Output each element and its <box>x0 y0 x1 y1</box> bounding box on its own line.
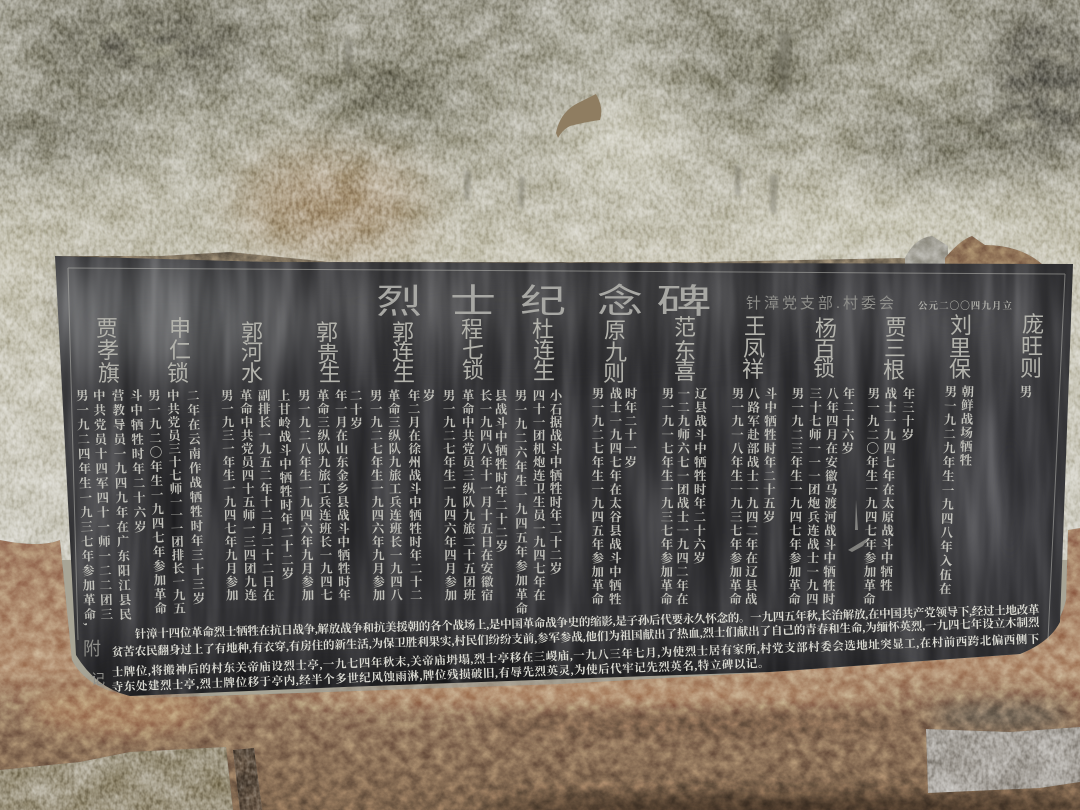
vertical biography columns: 革命中共党员三纵队九旅二十五团班 <box>459 388 476 602</box>
names of the fourteen martyrs: 东 <box>674 339 696 364</box>
names of the fourteen martyrs: 连 <box>392 340 414 365</box>
vertical biography columns: 长一九四八年十一月十五日在安徽宿 <box>478 388 494 602</box>
names of the fourteen martyrs: 孝 <box>97 338 119 363</box>
vertical biography columns: 男一九二八年生一九四六年九月参加 <box>296 389 314 602</box>
vertical biography columns: 营教导员一九四九年在广东阳江县民 <box>109 388 132 623</box>
bottom inscription paragraph: 寺东处建烈士亭,烈士牌位移于亭内,经半个多世纪风蚀雨淋,牌位残损破旧,有辱先烈英灵,为使后代牢记先烈英名,特立碑以记。 <box>112 656 770 694</box>
vertical biography columns: 岁 <box>421 388 435 402</box>
vertical biography columns <box>74 384 1032 628</box>
names of the fourteen martyrs: 保 <box>949 357 971 382</box>
date line: 公元二〇〇四九月立 <box>918 300 1012 312</box>
names of the fourteen martyrs: 仁 <box>169 338 191 363</box>
names of the fourteen martyrs: 九 <box>605 340 627 365</box>
vertical biography columns: 男一九二〇年生一九四七年参加革命 <box>146 389 167 616</box>
names of the fourteen martyrs: 程 <box>461 317 483 342</box>
vertical biography columns: 二年在云南作战牺牲时年三十三岁 <box>185 389 205 607</box>
vertical biography columns: 辽县战斗中牺牲时年二十六岁 <box>691 387 707 565</box>
names of the fourteen martyrs: 申 <box>169 316 191 341</box>
stone block bottom left <box>0 747 262 810</box>
slab engraved border lines <box>68 268 1065 640</box>
vertical biography columns: 年一月在山东金乡县战斗中牺牲时年 <box>333 388 351 602</box>
names of the fourteen martyrs: 生 <box>533 359 555 384</box>
names of the fourteen martyrs: 凤 <box>743 336 765 361</box>
vertical biography columns: 男一九二四年生一九三七年参加革命, <box>74 389 97 628</box>
left side label: 附记: 记 <box>91 671 105 687</box>
vertical biography columns: 三十七师一一一团炮兵连战士一九四 <box>804 387 823 606</box>
vertical biography columns: 上甘岭战斗中牺牲时年二十二岁 <box>276 388 294 581</box>
vertical biography columns: 男一九二七年生一九四六年四月参加 <box>441 389 457 602</box>
names of the fourteen martyrs: 贾 <box>885 315 907 340</box>
vertical biography columns: 革命中共党员四十五师一三四团九连 <box>237 388 257 602</box>
stone block bottom right <box>926 727 1080 793</box>
names of the fourteen martyrs: 喜 <box>674 359 696 384</box>
names of the fourteen martyrs: 锁 <box>462 358 484 383</box>
vertical biography columns: 男一九二七年生一九四六年九月参加 <box>368 389 385 602</box>
bottom inscription paragraph: 士牌位,将搬神后的村东关帝庙设烈士亭,一九七四年秋末,关帝庙坍塌,烈士亭移在三嵕庙,一九八三年七月,为使烈士居有家所,村党支部村委会选地址突显工,在村前西跨北偏西侧下 <box>112 632 1040 679</box>
names of the fourteen martyrs: 原 <box>604 318 626 343</box>
vertical biography columns: 战士一九四七年在太谷县战斗中牺牲 <box>607 386 622 606</box>
names of the fourteen martyrs: 郭 <box>241 320 263 345</box>
names of the fourteen martyrs: 则 <box>1020 356 1042 381</box>
panel: dark stone memorial slab <box>10 250 1080 714</box>
vertical biography columns: 男一九二六年生一九四五年参加革命 <box>513 389 528 616</box>
vertical biography columns: 斗中牺牲时年二十六岁 <box>128 388 147 535</box>
ground: soil in front of the wall <box>0 528 1080 810</box>
vertical biography columns: 男一九三一年生一九四七年九月参加 <box>219 389 239 602</box>
vertical biography columns: 革命三纵队九旅工兵连班长一九四七 <box>315 388 333 602</box>
names of the fourteen martyrs: 百 <box>814 337 836 362</box>
names of the fourteen martyrs: 杜 <box>532 317 554 342</box>
wall damage: exposed patch <box>556 94 601 138</box>
title: 烈士纪念碑: 碑 <box>656 282 712 320</box>
vertical biography columns: 二十岁 <box>348 389 363 431</box>
vertical biography columns: 男一九二〇年生一九四七年参加革命 <box>861 387 880 606</box>
names of the fourteen martyrs: 杨 <box>815 316 837 341</box>
left side label: 附记: 附 <box>83 639 101 659</box>
title: 烈士纪念碑: 纪 <box>520 282 566 321</box>
vertical biography columns: 县战斗中牺牲时年二十二岁 <box>493 388 508 553</box>
names of the fourteen martyrs: 根 <box>883 358 905 383</box>
names of the fourteen martyrs: 郭 <box>392 320 414 345</box>
vertical biography columns: 八年四月在安徽马渡河战斗中牺牲时 <box>821 387 839 606</box>
names of the fourteen martyrs: 刘 <box>950 313 972 338</box>
vertical biography columns: 男一九二九年生一九四八年入伍在 <box>937 385 957 597</box>
vertical biography columns: 年三十岁 <box>900 386 915 442</box>
vertical biography columns: 男 <box>1018 385 1032 398</box>
vertical biography columns: 八路军赴部战士一九四二年在辽县战 <box>743 387 760 606</box>
names of the fourteen martyrs: 七 <box>462 338 484 363</box>
names of the fourteen martyrs: 生 <box>393 361 415 386</box>
vertical biography columns: 年二月在徐州战斗中牺牲时年二十二 <box>406 388 423 602</box>
left side label: 附记 <box>83 639 105 687</box>
vertical biography columns: 小石据战斗中牺牲时年二十二岁 <box>548 389 562 575</box>
vertical biography columns: 战士一九四七年在太原战斗中牺牲 <box>878 386 897 593</box>
title: 烈士纪念碑: 念 <box>597 282 643 321</box>
vertical biography columns: 中共党员三十七师一一一团排长一九五 <box>164 388 186 615</box>
dedication: party branch and village committee: 针漳党支部.村委会 <box>746 294 894 312</box>
names of the fourteen martyrs: 旗 <box>98 361 120 386</box>
rubble on top of the slab <box>55 236 1042 272</box>
scratch mark on the slab <box>848 500 868 552</box>
title: 烈士纪念碑 <box>376 282 712 321</box>
bottom inscription paragraph: 针漳十四位革命烈士牺牲在抗日战争,解放战争和抗美援朝的各个战场上,是中国革命战争史的缩影,是子孙后代要永久怀念的。一九四五年秋,长治解放,在中国共产党领导下,经过土地改革 <box>135 603 1040 641</box>
names of the fourteen martyrs: 王 <box>744 314 766 339</box>
vertical biography columns: 朝鲜战场牺牲 <box>958 384 974 467</box>
names of the fourteen martyrs: 郭 <box>316 320 338 345</box>
names of the fourteen martyrs: 锁 <box>813 356 835 381</box>
names of the fourteen martyrs: 范 <box>674 315 696 340</box>
vertical biography columns: 副排长一九五二年十二月二十二日在 <box>256 388 275 602</box>
names of the fourteen martyrs: 锁 <box>167 361 189 386</box>
bottom inscription paragraph <box>112 603 1041 694</box>
names of the fourteen martyrs: 水 <box>241 361 263 386</box>
names of the fourteen martyrs: 旺 <box>1021 334 1043 359</box>
names of the fourteen martyrs <box>96 312 1044 386</box>
names of the fourteen martyrs: 里 <box>949 336 971 361</box>
background: weathered plaster wall <box>0 0 1080 560</box>
vertical biography columns: 时年二十一岁 <box>623 386 637 469</box>
bottom inscription paragraph: 贫苦农民翻身过上了有地种,有衣穿,有房住的新生活,为保卫胜利果实,村民们纷纷支前,参军参战,他们为祖国献出了热血,烈士们献出了自己的青春和生命,为缅怀英烈,一九四七年设立木制烈 <box>112 615 1041 659</box>
names of the fourteen martyrs: 庞 <box>1022 312 1044 337</box>
vertical biography columns: 斗中牺牲时年二十五岁 <box>761 386 777 524</box>
vertical biography columns: 男一九二七年生一九四五年参加革命 <box>590 387 604 606</box>
wall stains and chipped specks <box>345 30 792 215</box>
vertical biography columns: 年二十六岁 <box>840 386 855 456</box>
names of the fourteen martyrs: 贵 <box>317 342 339 367</box>
vertical biography columns: 男一九一八年生一九三七年参加革命 <box>727 387 744 606</box>
vertical biography columns: 四十一团机炮连卫生员一九四七年在 <box>530 389 547 602</box>
names of the fourteen martyrs: 祥 <box>742 357 764 382</box>
title: 烈士纪念碑: 烈 <box>376 282 422 321</box>
vertical biography columns: 革命三纵队九旅工兵连班长一九四八 <box>386 388 403 602</box>
vertical biography columns: 男一九二三年生一九四七年参加革命 <box>786 387 804 606</box>
vertical biography columns: 一二九师六七一团战士一九四二年在 <box>674 387 690 606</box>
names of the fourteen martyrs: 河 <box>241 340 263 365</box>
vertical biography columns: 男一九一七年生一九三七年参加革命 <box>658 387 674 606</box>
names of the fourteen martyrs: 三 <box>884 336 906 361</box>
names of the fourteen martyrs: 贾 <box>96 316 118 341</box>
names of the fourteen martyrs: 连 <box>533 338 555 363</box>
vertical biography columns: 中共党员十四军四十一师一二二团三 <box>90 388 113 623</box>
names of the fourteen martyrs: 生 <box>319 361 341 386</box>
names of the fourteen martyrs: 则 <box>603 361 625 386</box>
title: 烈士纪念碑: 士 <box>450 282 496 321</box>
